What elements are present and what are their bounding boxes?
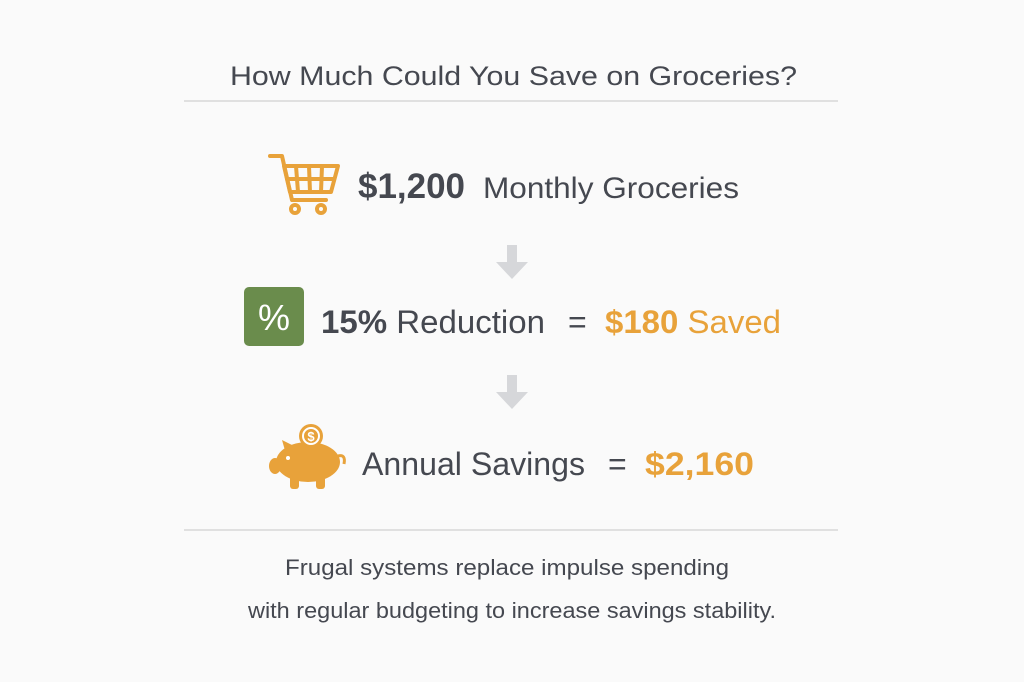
footer text	[247, 555, 776, 623]
icon: piggy bank	[269, 424, 344, 489]
row: annual savings: =	[608, 446, 627, 482]
arrow 1	[496, 245, 528, 279]
row: reduction: =	[568, 304, 587, 340]
row: annual savings: $2,160	[645, 446, 754, 482]
arrow 2	[496, 375, 528, 409]
text: Annual Savings = $2,160: Annual Savings	[362, 446, 585, 482]
title: How Much Could You Save on Groceries?	[230, 61, 797, 91]
row: reduction: $180 Saved	[605, 304, 781, 340]
footer text: with regular budgeting to increase savings stability.	[247, 598, 776, 623]
row: annual savings	[269, 424, 754, 489]
footer text: Frugal systems replace impulse spending	[285, 555, 729, 580]
icon: percent box	[244, 287, 304, 346]
icon: shopping cart	[270, 156, 338, 213]
row: monthly groceries	[270, 156, 739, 213]
text: 15% Reduction = $180 Saved: 15% Reduction	[321, 304, 545, 340]
row: monthly groceries: Monthly Groceries	[483, 172, 739, 205]
text: $1,200 Monthly Groceries: $1,200	[358, 167, 465, 206]
row: reduction	[244, 287, 781, 346]
icon: percent box: %	[258, 297, 290, 338]
icon: piggy bank: $	[307, 429, 315, 444]
